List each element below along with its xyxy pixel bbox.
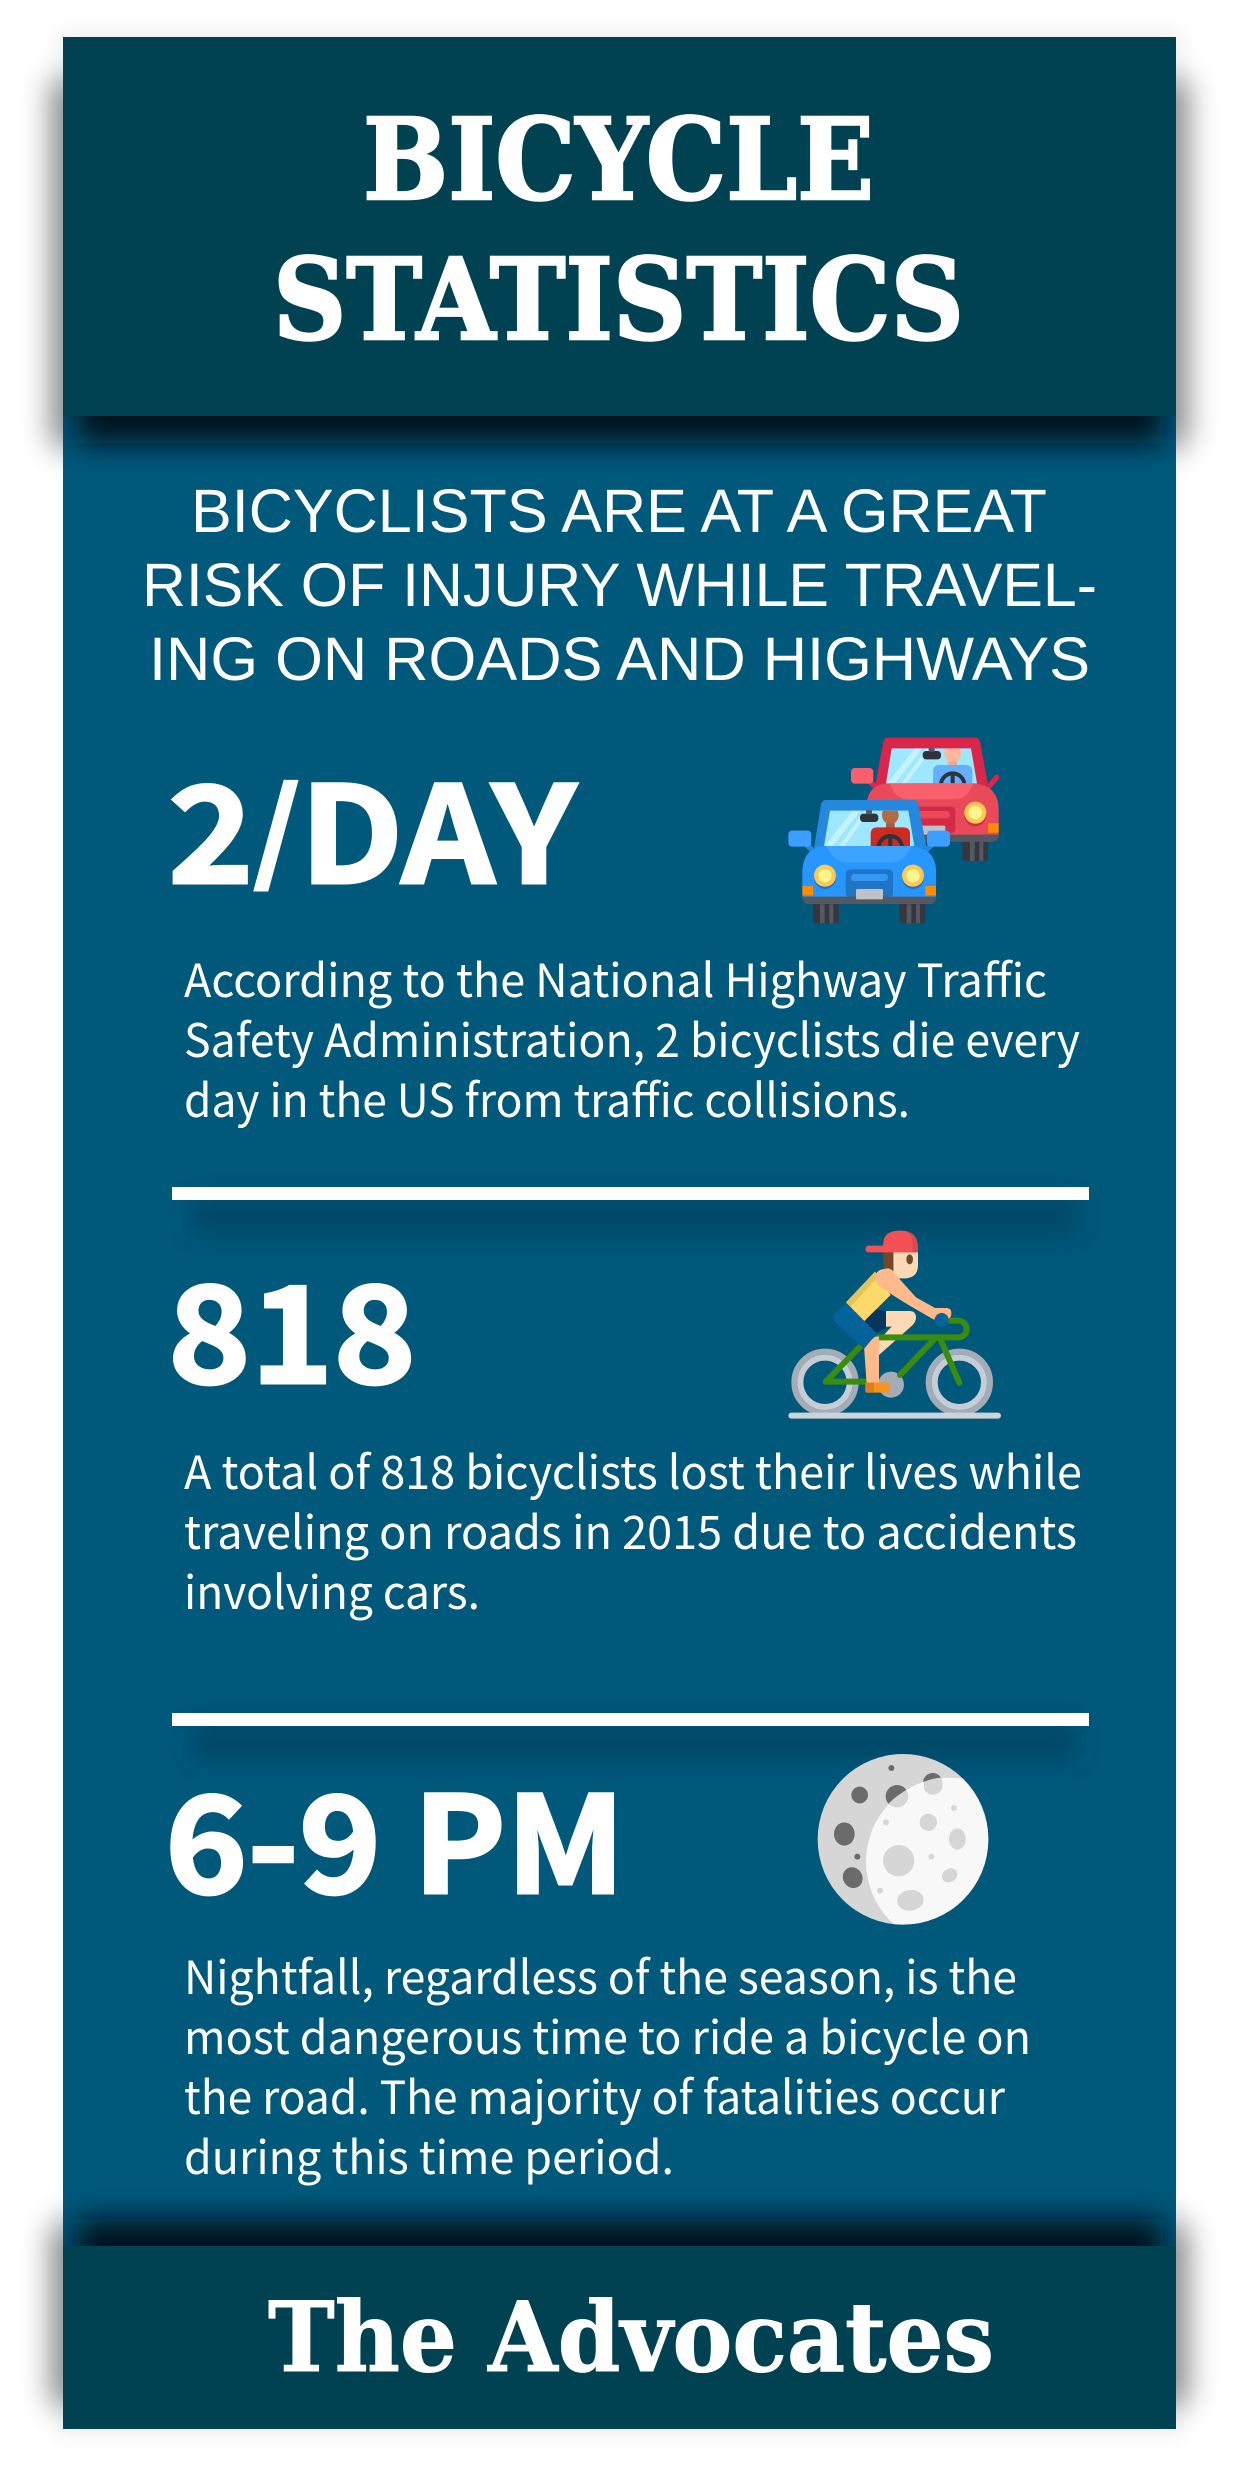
stat heading: 818: 818 bbox=[168, 1228, 416, 1422]
title bbox=[273, 95, 964, 366]
footer brand name: The Advocates bbox=[268, 2281, 994, 2394]
description: 818: involving cars. bbox=[184, 1557, 480, 1623]
header outer shadow bbox=[50, 30, 1189, 470]
icon: cyclist bbox=[788, 1231, 1001, 1419]
stat heading: 2/day: / bbox=[254, 742, 300, 902]
icon: red car bbox=[851, 738, 999, 861]
description: 6-9 PM: most dangerous time to ride a bicycle on bbox=[184, 2002, 1031, 2068]
intro text: RISK OF INJURY WHILE TRAVEL- bbox=[142, 551, 1097, 619]
title: STATISTICS bbox=[273, 235, 964, 366]
description: 6-9 PM: the road. The majority of fatalities occur bbox=[184, 2062, 1005, 2128]
icon: blue car bbox=[788, 800, 950, 923]
description: 6-9 PM: during this time period. bbox=[184, 2122, 674, 2188]
title: BICYCLE bbox=[363, 95, 874, 226]
stat heading: 2/day: 2 bbox=[168, 728, 247, 922]
footer outer shadow bbox=[50, 2200, 1189, 2436]
stat heading: 2/day: DAY bbox=[300, 728, 577, 922]
description: 2/day: Safety Administration, 2 bicyclists die every bbox=[184, 1005, 1080, 1071]
description: 818: A total of 818 bicyclists lost their lives while bbox=[184, 1437, 1082, 1503]
header band bbox=[63, 37, 1176, 416]
intro text: ING ON ROADS AND HIGHWAYS bbox=[149, 625, 1090, 693]
description: 6-9 PM: Nightfall, regardless of the season, is the bbox=[184, 1942, 1017, 2008]
intro text bbox=[142, 477, 1097, 693]
intro text: BICYCLISTS ARE AT A GREAT bbox=[191, 477, 1047, 545]
stat heading: 6-9 PM: 6-9 PM bbox=[165, 1738, 625, 1932]
icon: two cars bbox=[788, 738, 999, 923]
description: 6-9 PM bbox=[184, 1942, 1031, 2188]
footer band bbox=[63, 2246, 1176, 2429]
description: 2/day: day in the US from traffic collisions. bbox=[184, 1065, 910, 1131]
icon: moon bbox=[818, 1754, 988, 1925]
description: 818: traveling on roads in 2015 due to accidents bbox=[184, 1497, 1077, 1563]
description: 2/day: According to the National Highway Traffic bbox=[184, 945, 1047, 1011]
description: 2/day bbox=[184, 945, 1080, 1131]
description: 818 bbox=[184, 1437, 1082, 1623]
